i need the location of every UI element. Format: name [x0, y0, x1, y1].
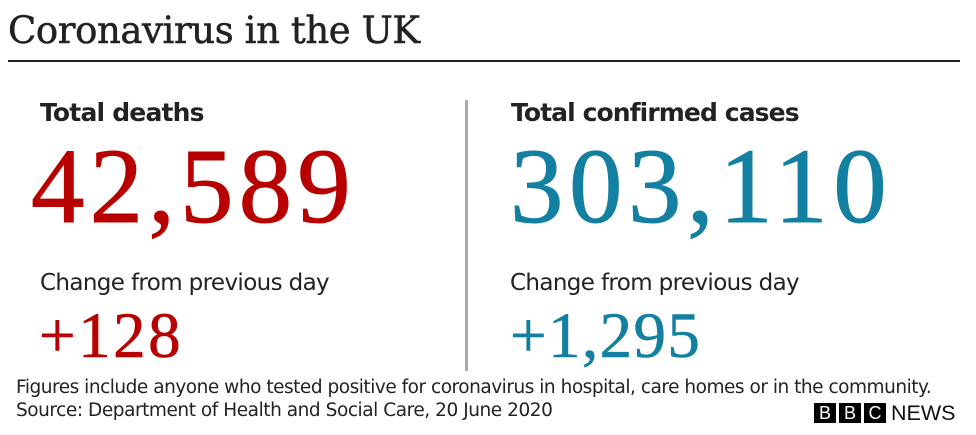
- number: cases change: +1,295: [510, 300, 701, 372]
- footnote: Figures include anyone who tested positive for coronavirus in hospital, care homes or in the community.: [16, 377, 931, 398]
- logo: BBC News: NEWS: [891, 401, 956, 425]
- logo: BBC News: B: [844, 403, 856, 423]
- source: Source: Department of Health and Social Care, 20 June 2020: [16, 400, 552, 421]
- number: total deaths: 42,589: [31, 128, 356, 246]
- divider: [465, 100, 468, 371]
- logo: BBC News: C: [868, 403, 882, 423]
- heading: total deaths: Total deaths: [40, 98, 204, 127]
- panel: total deaths: [31, 98, 356, 372]
- title: Coronavirus in the UK: [8, 9, 420, 52]
- logo: BBC News: B: [819, 403, 831, 423]
- label: cases change: Change from previous day: [510, 270, 799, 296]
- number: deaths change: +128: [39, 300, 183, 372]
- number: confirmed cases: 303,110: [510, 128, 892, 246]
- label: deaths change: Change from previous day: [40, 270, 329, 296]
- title rule: [8, 60, 960, 62]
- heading: confirmed cases: Total confirmed cases: [511, 98, 799, 127]
- logo: BBC News: [814, 401, 956, 425]
- panel: confirmed cases: [510, 98, 892, 372]
